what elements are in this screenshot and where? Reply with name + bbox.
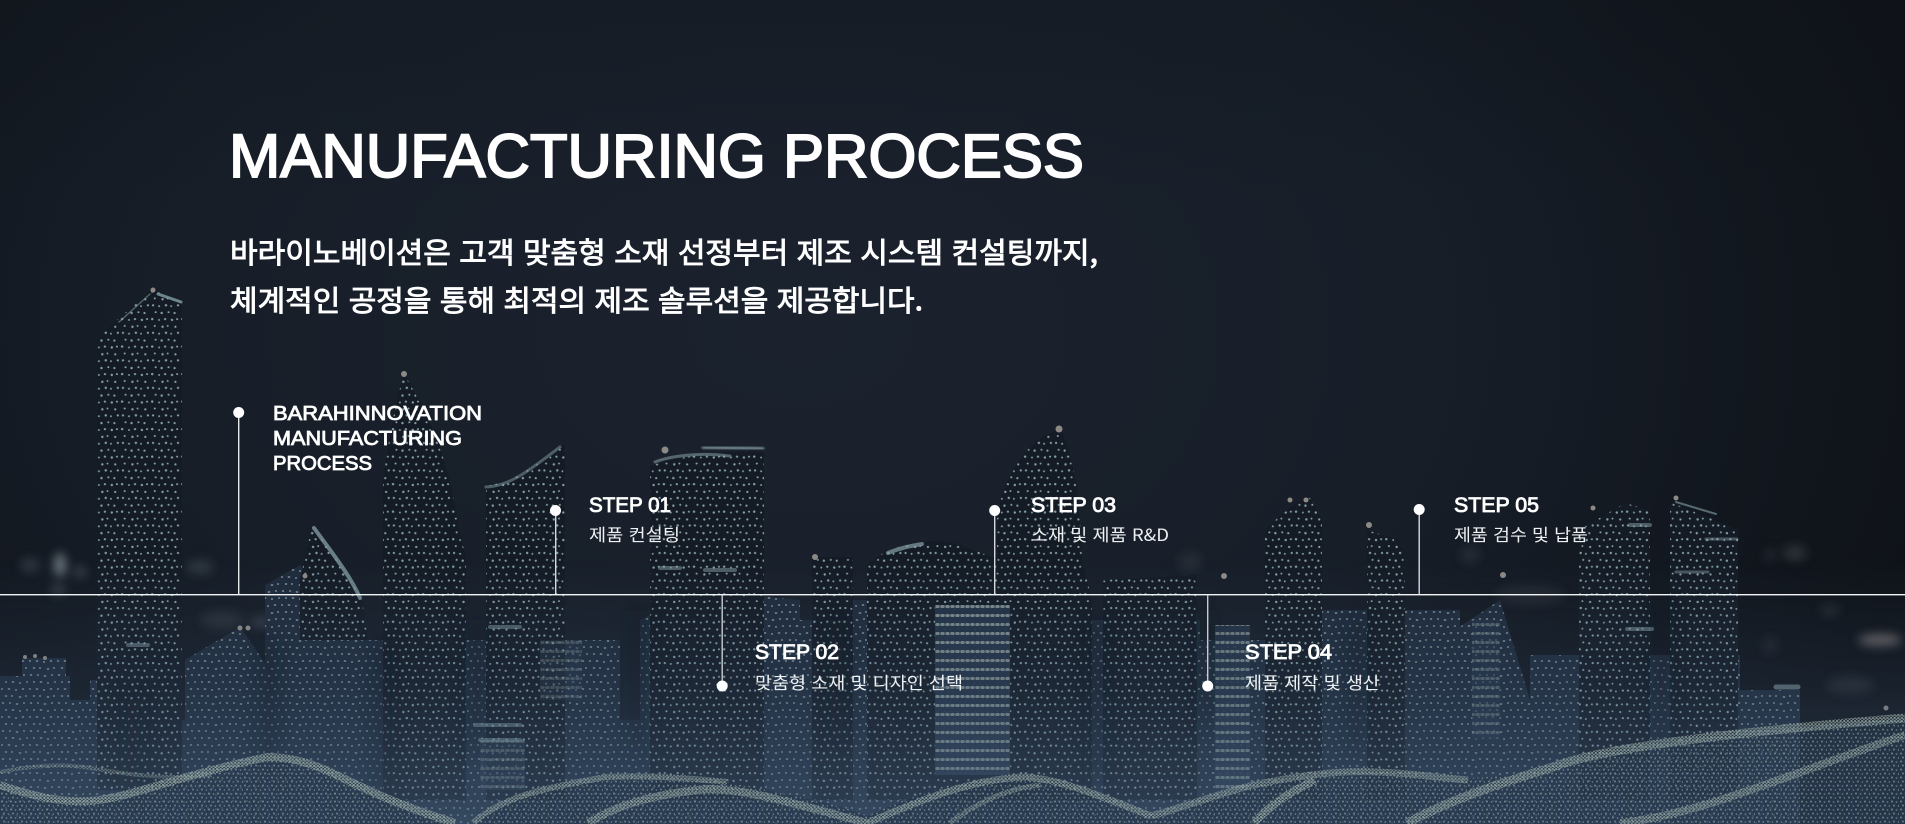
intro marker: barahinnovation manufacturing process xyxy=(233,403,482,594)
step 02: 맞춤형 소재 및 디자인 선택 xyxy=(755,669,963,694)
step 05: STEP 05 xyxy=(1454,494,1539,517)
step 01: 제품 컨설팅 xyxy=(589,521,680,546)
step 01 xyxy=(550,494,680,594)
subtitle text block: 체계적인 공정을 통해 최적의 제조 솔루션을 제공합니다. xyxy=(230,278,923,320)
intro marker: barahinnovation manufacturing process: MANUFACTURING xyxy=(273,428,462,450)
dotted terrain waves xyxy=(0,718,1905,824)
step 04 xyxy=(1202,595,1380,694)
skyline: back row of dotted buildings xyxy=(0,565,1800,824)
step 03 xyxy=(989,494,1169,594)
title: MANUFACTURING PROCESS xyxy=(229,122,1084,190)
background: blurred city lights xyxy=(20,545,1902,694)
subtitle text block xyxy=(230,230,1098,320)
intro marker: barahinnovation manufacturing process: PROCESS xyxy=(273,453,372,475)
step 05 xyxy=(1414,494,1588,594)
step 04: STEP 04 xyxy=(1245,641,1332,664)
step 03: 소재 및 제품 R&D xyxy=(1031,521,1169,546)
haze over the lower city xyxy=(0,560,1905,824)
step 01: STEP 01 xyxy=(589,494,671,517)
skyline: front row of dotted towers xyxy=(97,289,1738,800)
step 03: STEP 03 xyxy=(1031,494,1116,517)
skyline: dark gaps between towers xyxy=(126,600,1669,810)
skyline: lit window bands xyxy=(480,605,1500,790)
timeline axis xyxy=(0,594,1905,595)
step 04: 제품 제작 및 생산 xyxy=(1245,669,1380,694)
step 05: 제품 검수 및 납품 xyxy=(1454,521,1588,546)
subtitle text block: 바라이노베이션은 고객 맞춤형 소재 선정부터 제조 시스템 컨설팅까지, xyxy=(230,230,1098,272)
step 02 xyxy=(717,595,963,694)
intro marker: barahinnovation manufacturing process: BARAHINNOVATION xyxy=(273,403,482,425)
skyline: roof highlights and beacons xyxy=(23,288,1888,740)
step 02: STEP 02 xyxy=(755,641,839,664)
